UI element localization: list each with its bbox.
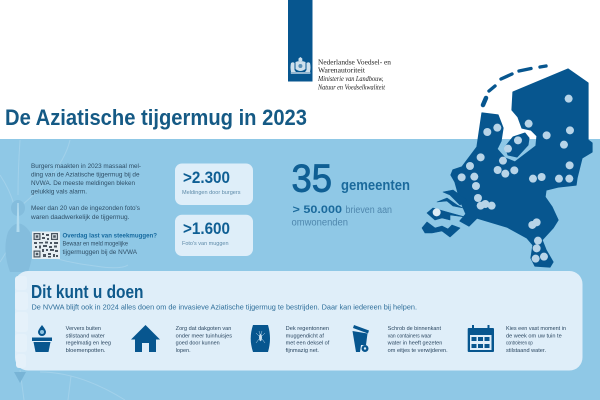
mosquito illustration background (0, 140, 128, 400)
tip: pots (66, 326, 111, 354)
municipalities statistic: omwonenden (292, 218, 348, 228)
icon: wheelie bin (352, 325, 369, 352)
ministry name: Nederlandse Voedsel- en (318, 58, 392, 66)
map: mainland (451, 69, 592, 267)
tip: gutters: onder meer tuinhuisjes (176, 333, 232, 339)
panel subheading: De NVWA blijft ook in 2024 alles doen om de invasieve Aziatische tijgermug te bestrijden. Daar kan iedereen bij helpen. (32, 302, 417, 311)
intro text: NVWA. De meeste meldingen bleken (31, 180, 135, 187)
tip: containers: water in heeft gezeten (387, 341, 442, 347)
tip: gutters: lopen. (176, 348, 191, 354)
mosquito abdomen overlay (15, 276, 28, 368)
header logo (288, 0, 392, 92)
tip: gutters: Zorg dat dakgoten van (176, 326, 231, 332)
QR caption: Overdag last van steekmuggen? (62, 232, 157, 239)
map: Zeeland islands (422, 190, 467, 237)
logo ribbon (288, 0, 312, 82)
stat card: reports (175, 164, 253, 205)
tip: weekly check: controleren op (506, 341, 533, 347)
stat card: photos: Foto's van muggen (182, 241, 228, 247)
map of the Netherlands (422, 66, 592, 267)
icon: rain barrel with mosquito (251, 325, 270, 352)
tip: pots: Ververs buiten (66, 326, 101, 332)
tip: pots: stilstaand water (66, 333, 105, 339)
municipalities statistic: 35 (292, 158, 332, 200)
map: municipality dots (433, 95, 574, 263)
tip: containers (387, 326, 448, 354)
panel: what you can do (15, 271, 582, 370)
ministry name: Natuur en Voedselkwaliteit (317, 84, 386, 92)
intro text: waren daadwerkelijk de tijgermug. (30, 214, 130, 221)
icon: flower pot with drop (32, 325, 52, 352)
intro text: ding van de Aziatische tijgermug bij de (31, 172, 140, 178)
map: Flevoland (505, 133, 529, 157)
QR caption: tijgermuggen bij de NVWA (62, 249, 138, 256)
stat card: photos (175, 215, 253, 256)
intro text (30, 163, 141, 221)
tip: rain barrels: muggendicht af (286, 333, 325, 339)
stat card: reports: Meldingen door burgers (182, 190, 241, 196)
QR code (32, 232, 60, 259)
ministry name: Ministerie van Landbouw, (317, 75, 384, 83)
title: De Aziatische tijgermug in 2023 (5, 105, 307, 130)
tip: weekly check (506, 326, 566, 354)
map: Wadden islands (483, 66, 546, 105)
icon: calendar (468, 325, 494, 352)
tip: rain barrels: fijnmazig net. (286, 348, 319, 354)
blue background band (0, 139, 600, 400)
tip: gutters (176, 326, 232, 354)
tip: rain barrels (286, 326, 330, 354)
tip: containers: Schrob de binnenkant (388, 326, 442, 332)
intro text: gelukkig vals alarm. (31, 188, 87, 196)
tip: weekly check: Kies een vast moment in (506, 326, 566, 332)
tip: pots: bloemenpotten. (66, 348, 105, 354)
tip: rain barrels: met een deksel of (286, 341, 330, 347)
tip: weekly check: de week om uw tuin te (506, 333, 562, 339)
municipalities statistic: gemeenten (341, 178, 410, 194)
ministry name (317, 58, 392, 92)
QR caption (62, 232, 157, 256)
tip: containers: van containers waar (388, 333, 432, 339)
icon: house (131, 325, 160, 352)
tip: gutters: goed door kunnen (176, 341, 220, 347)
icon: crest (290, 57, 310, 74)
stat card: reports: >2.300 (183, 168, 230, 187)
panel background (15, 271, 582, 370)
QR caption: Bewaar en meld mogelijke (62, 241, 128, 248)
ministry name: Warenautoriteit (318, 66, 365, 74)
intro text: Burgers maakten in 2023 massaal mel- (31, 163, 141, 170)
tip: pots: regelmatig en leeg (66, 341, 111, 347)
municipalities statistic: > 50.000 (292, 204, 342, 216)
stat card: photos: >1.600 (183, 219, 230, 238)
intro text: Meer dan 20 van de ingezonden foto's (31, 205, 140, 212)
panel heading: Dit kunt u doen (31, 281, 144, 302)
tip: containers: om eitjes te verwijderen. (388, 348, 448, 354)
tip: rain barrels: Dek regentonnen (286, 326, 329, 332)
tip: weekly check: stilstaand water. (506, 348, 546, 354)
municipalities statistic (292, 158, 410, 228)
municipalities statistic: brieven aan (346, 205, 392, 216)
